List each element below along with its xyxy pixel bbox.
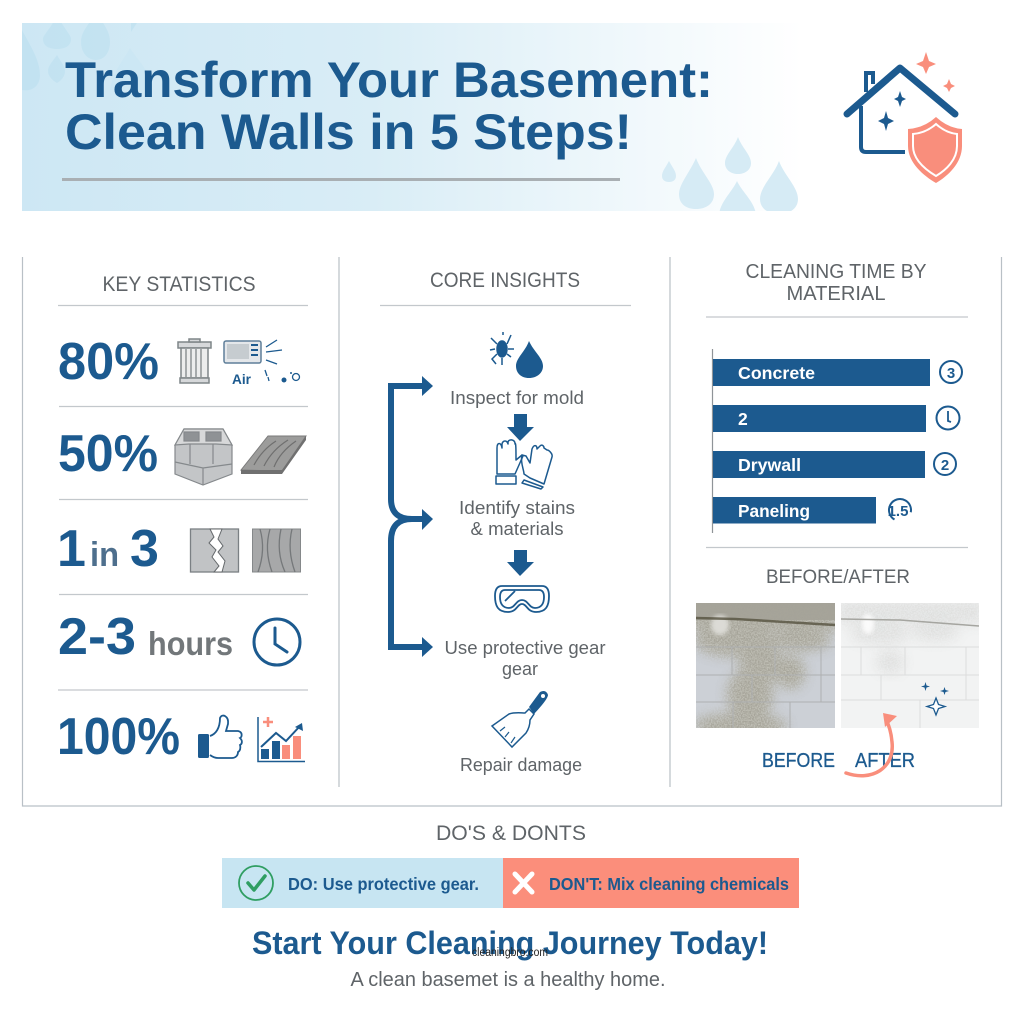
icon: concrete block: [175, 429, 232, 485]
icon: paint brush: [492, 691, 548, 747]
title: Clean Walls in 5 Steps!: [65, 104, 632, 160]
text: repair damage: Repair damage: [460, 755, 582, 775]
value: 3: [940, 361, 962, 383]
arrow: down: [507, 414, 534, 441]
text: identify stains: [459, 498, 575, 539]
text: inspect for mold: Inspect for mold: [450, 388, 584, 408]
icon: air filter: [178, 339, 211, 383]
heading: cleaning time by material: [746, 261, 926, 305]
stat: 100%: 100%: [57, 708, 180, 766]
header banner: [22, 10, 802, 215]
value: clock: [936, 406, 960, 430]
icon: growth chart: [258, 717, 305, 762]
icon: water drop: [516, 341, 543, 378]
title: [65, 52, 713, 160]
photo: after: [841, 603, 979, 728]
photo: before: [696, 603, 835, 728]
value: 2: [934, 453, 956, 475]
icon: air conditioner with particles: Air: [232, 371, 252, 387]
icon: clock: [254, 619, 300, 665]
value: 2: 2: [941, 457, 949, 474]
title: Transform Your Basement:: [65, 52, 713, 108]
stat: 80%: 80%: [58, 333, 159, 391]
decorative water drops, bottom right: [662, 137, 798, 215]
bar: 2: 2: [738, 409, 748, 429]
bar: concrete: Concrete: [738, 363, 815, 383]
bar: paneling: [713, 497, 876, 524]
arrow: before to after: [846, 713, 897, 776]
value: 1.5: 1.5: [888, 503, 908, 520]
decorative water drops, top left: [22, 23, 136, 90]
icon: goggles: [495, 586, 549, 612]
panel: don't: [503, 858, 799, 908]
stat: 2-3 hours: 2-3: [58, 608, 136, 666]
call to action: Start Your Cleaning Journey Today!: [252, 925, 768, 961]
text: use protective gear: Use protective gear: [444, 638, 606, 658]
labels: before and after: [762, 750, 915, 772]
labels: before and after: BEFORE: [762, 750, 835, 772]
icon: cross: [515, 874, 532, 892]
value: 1.5: [885, 495, 915, 525]
heading: before/after: BEFORE/AFTER: [766, 567, 910, 588]
text: do: DO: Use protective gear.: [288, 874, 479, 894]
icon: gloves: [496, 440, 552, 489]
icon: house with shield and sparkles: [847, 52, 962, 183]
icon: check circle: [239, 866, 273, 900]
bar: drywall: Drywall: [738, 455, 801, 475]
icon: cracked wall: [190, 529, 238, 572]
bar: paneling: Paneling: [738, 501, 810, 521]
text: don't: DON'T: Mix cleaning chemicals: [549, 874, 789, 894]
bar chart: [712, 349, 962, 533]
heading: cleaning time by material: CLEANING TIME BY: [746, 261, 926, 283]
text: use protective gear: [444, 638, 606, 679]
icon: wood grain square: [252, 529, 300, 572]
bar: 2: [713, 405, 926, 432]
stat: 1 in 3: 3: [130, 520, 159, 578]
heading: core insights: CORE INSIGHTS: [430, 269, 580, 292]
tagline: A clean basemet is a healthy home.: [350, 969, 666, 991]
watermark: cleaningbro.com: [472, 947, 548, 959]
main panel frame: [22, 257, 1002, 806]
stat: 2-3 hours: hours: [148, 625, 233, 662]
stat: 50%: 50%: [58, 425, 158, 483]
panel: key statistics: [57, 273, 308, 766]
value: 3: 3: [947, 365, 955, 382]
panel: do: [222, 858, 503, 908]
heading: key statistics: KEY STATISTICS: [102, 273, 256, 296]
panel: core insights: [380, 269, 631, 775]
arrow: down: [507, 550, 534, 576]
stat: 1 in 3: 1: [57, 520, 86, 578]
icon: air conditioner with particles: [224, 340, 300, 387]
heading: do's and don'ts: DO'S & DONTS: [436, 822, 586, 845]
text: use protective gear: gear: [502, 659, 538, 679]
icon: sparkles: [921, 682, 949, 715]
bracket arrows: [391, 376, 433, 657]
stat: 1 in 3: [57, 520, 159, 578]
labels: before and after: AFTER: [855, 750, 915, 772]
stat: 2-3 hours: [58, 608, 233, 666]
panel: cleaning time by material: [696, 261, 979, 776]
icon: mold bug: [490, 332, 514, 365]
icon: wood panel: [241, 436, 306, 474]
bar: drywall: [713, 451, 925, 478]
bar: concrete: [713, 359, 930, 386]
text: identify stains: Identify stains: [459, 498, 575, 518]
stat: 1 in 3: in: [90, 536, 119, 574]
icon: thumbs up: [198, 716, 242, 758]
text: identify stains: & materials: [470, 519, 564, 539]
heading: cleaning time by material: MATERIAL: [786, 283, 886, 305]
